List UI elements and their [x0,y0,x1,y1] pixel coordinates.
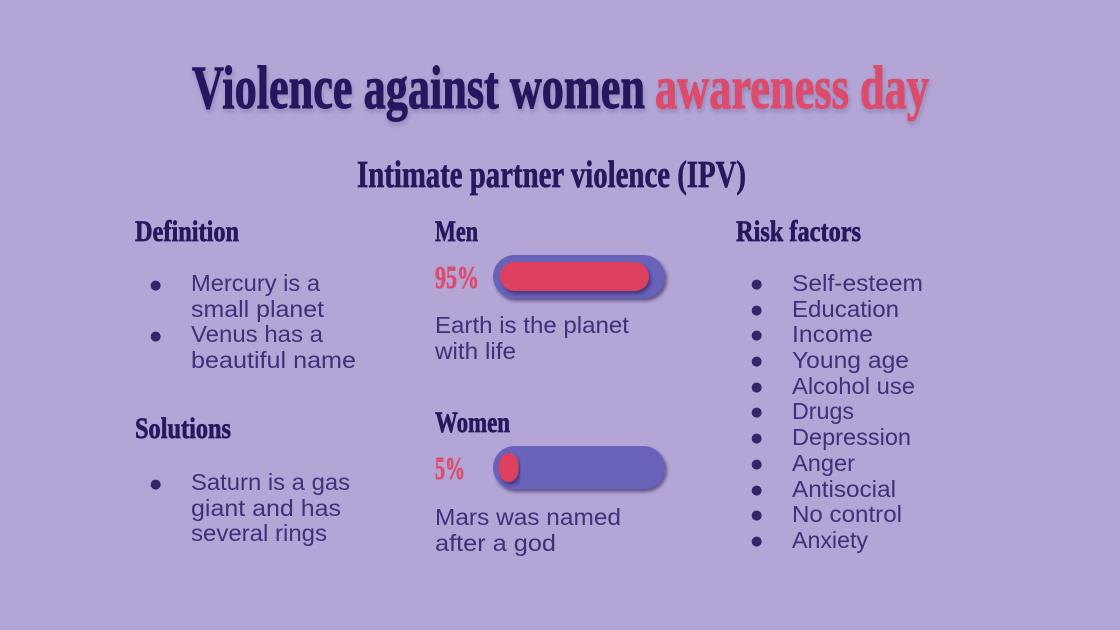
list: solutions items: giant and has [191,495,341,521]
list: risk factors items: ● [751,431,762,446]
list: risk factors items [751,270,923,553]
list: definition items: Venus has a [191,321,323,347]
list: risk factors items: Alcohol use [792,373,915,399]
list: definition items [150,270,356,373]
list: risk factors items: Self-esteem [792,270,923,296]
list: risk factors items: No control [792,501,902,527]
percentage: 95%: 95% [435,259,479,295]
panel: solutions [135,412,350,546]
list: risk factors items: Anxiety [792,527,868,553]
list: risk factors items: ● [751,457,762,472]
list: risk factors items: Income [792,321,873,347]
list: solutions items [150,469,350,546]
list: risk factors items: ● [751,405,762,420]
panel: risk factors [736,215,923,553]
list: solutions items: several rings [191,520,327,546]
percentage: 5%: 5% [435,450,465,486]
progress bar: women 5% [493,446,665,489]
list: risk factors items: ● [751,277,762,292]
progress bar: men 95% [493,255,665,298]
heading: men: Men [435,215,478,248]
list: definition items: Mercury is a [191,270,320,296]
list: solutions items: ● [150,477,161,492]
heading: women: Women [435,406,510,439]
list: definition items: beautiful name [191,347,356,373]
list: risk factors items: ● [751,534,762,549]
list: risk factors items: ● [751,328,762,343]
list: risk factors items: Education [792,296,899,322]
list: risk factors items: ● [751,483,762,498]
list: risk factors items: ● [751,380,762,395]
list: solutions items: Saturn is a gas [191,469,350,495]
panel: men [434,215,665,364]
caption: women: Mars was named [435,504,621,530]
caption: men: with life [434,338,516,364]
list: definition items: ● [150,329,161,344]
title: Violence against women [192,55,645,122]
list: definition items: ● [150,278,161,293]
heading: definition: Definition [135,215,239,248]
list: risk factors items: Drugs [792,398,854,424]
list: risk factors items: Depression [792,424,911,450]
list: definition items: small planet [191,296,325,322]
panel: definition [135,215,356,373]
list: risk factors items: Antisocial [792,476,896,502]
caption: men: Earth is the planet [435,312,630,338]
heading: solutions: Solutions [135,412,231,445]
list: risk factors items: ● [751,354,762,369]
caption: men [434,312,630,364]
caption: women [435,504,621,556]
panel: women [435,406,665,556]
list: risk factors items: ● [751,303,762,318]
subtitle: Intimate partner violence (IPV) [357,154,746,196]
caption: women: after a god [435,530,556,556]
title: awareness day [655,55,929,122]
heading: risk factors: Risk factors [736,215,861,248]
list: risk factors items: ● [751,508,762,523]
list: risk factors items: Young age [792,347,909,373]
list: risk factors items: Anger [792,450,855,476]
